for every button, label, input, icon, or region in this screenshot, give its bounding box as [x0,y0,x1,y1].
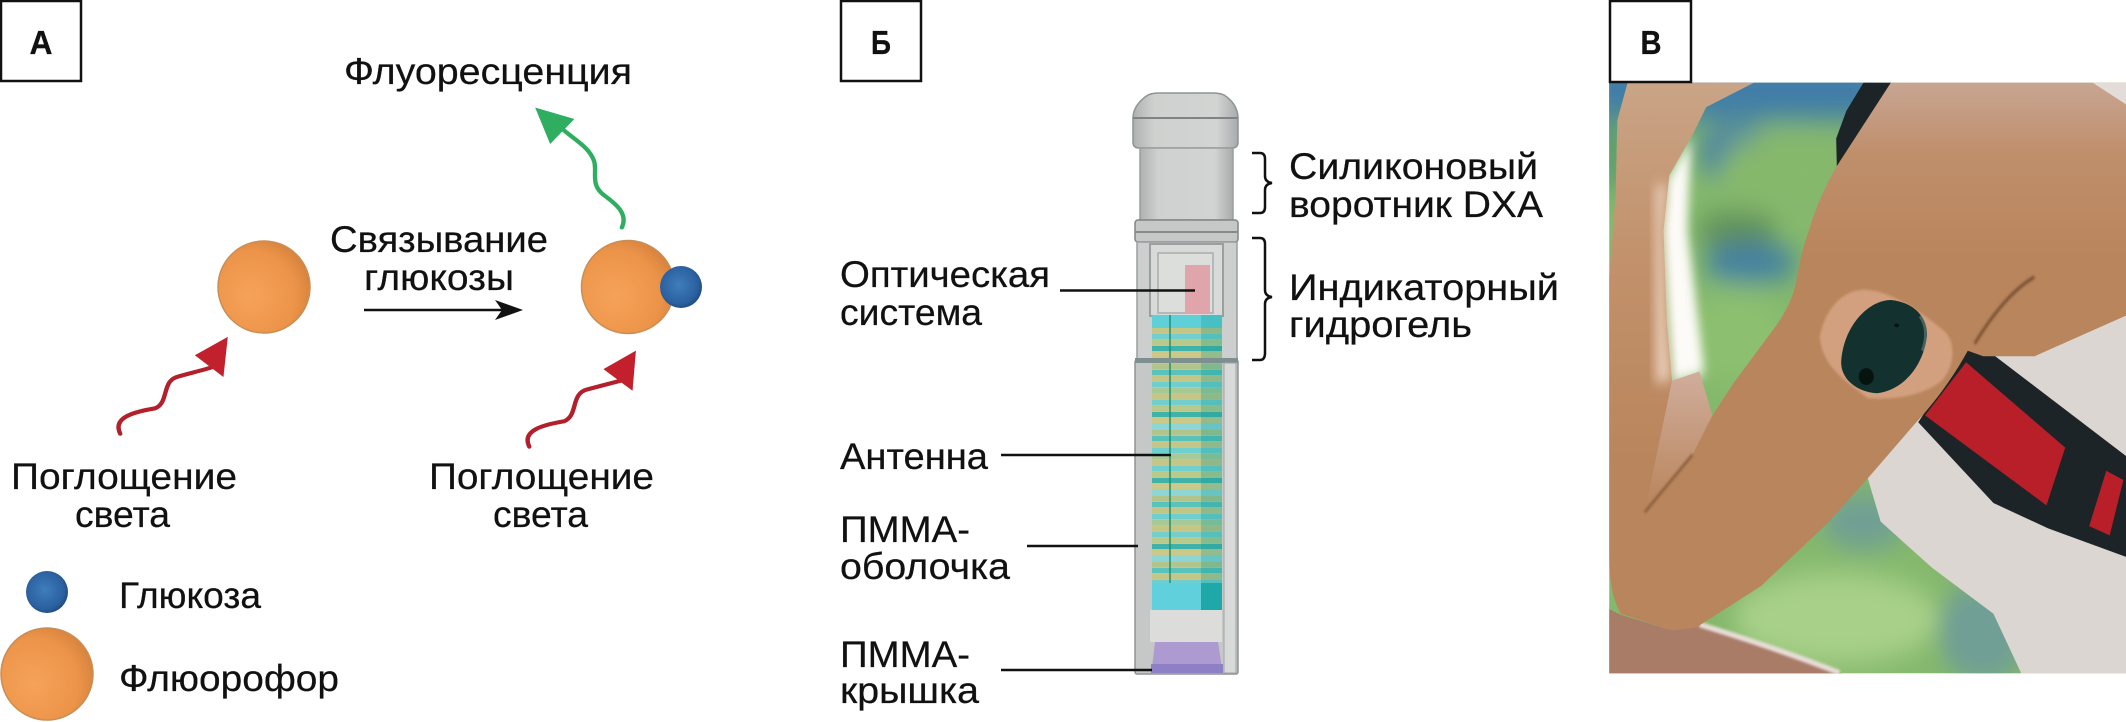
label: PMMA cap: крышка [840,670,979,711]
legend: fluorophore: Флюорофор [119,658,339,699]
label: fluorescence: Флуоресценция [344,51,632,92]
label: glucose binding [330,219,548,298]
chest strap dark [1918,339,2126,558]
hydrogel lower block [1152,583,1222,610]
upper arm and torso [1645,83,2126,630]
label: light absorption right: света [493,494,588,535]
legend: fluorophore [1,628,339,720]
transmitter device [1841,300,1927,393]
label: optical system: Оптическая [840,254,1050,295]
junction line [1135,358,1238,363]
sensor body diagram [1133,93,1238,674]
label: indicator hydrogel: Индикаторный [1289,267,1559,308]
panel label В [1610,1,1691,82]
label: indicator hydrogel [1289,267,1559,345]
label: PMMA cap [840,634,979,711]
fluorophore bound to glucose [582,240,702,334]
optical system [1158,253,1213,313]
label: light absorption left: света [75,494,170,535]
chest strap red [1925,362,2065,505]
brace: silicone collar [1252,153,1272,213]
label: light absorption right [429,456,654,535]
label: silicone collar [1289,146,1543,225]
silicone collar [1140,148,1233,220]
arrow: red absorbed light left [119,337,228,434]
label: PMMA cap: ПММА- [840,634,970,675]
label: PMMA shell: ПММА- [840,509,970,550]
elbow fold [1650,372,1712,490]
sensor cap [1133,93,1238,148]
panel label Б: Б [871,24,891,61]
label: antenna: Антенна [840,436,988,477]
PMMA shell lower [1135,360,1238,674]
label: glucose binding: Связывание [330,219,548,260]
panel label A [1,1,81,81]
fluorophore without glucose [218,241,310,333]
antenna windings [1152,315,1222,610]
shoulder strap [1836,83,1892,167]
legend: glucose [26,571,261,616]
arrow: binding reaction [364,300,523,320]
panel C: sensor on the arm [1590,1,2126,683]
top right shirt corner [2093,83,2126,107]
PMMA cap purple [1151,642,1223,673]
leader lines [1001,290,1195,670]
forearm lit edge [1655,185,1672,383]
label: light absorption left [11,456,237,535]
panel B: sensor construction [840,1,1559,711]
label: PMMA shell: оболочка [840,546,1010,587]
shell inner right wall [1224,363,1236,673]
skin patch [1820,290,1952,399]
label: light absorption right: Поглощение [429,456,654,497]
label: PMMA shell [840,509,1010,587]
brace: indicator hydrogel [1252,238,1272,360]
chest strap small red [2089,471,2123,535]
label: indicator hydrogel: гидрогель [1289,304,1472,345]
collar ring [1135,220,1238,242]
grey spacer [1150,610,1222,642]
shirt [1867,312,2126,674]
label: silicone collar: воротник DXA [1289,184,1543,225]
photo background [1590,60,2126,683]
PMMA shell upper [1137,242,1237,362]
arrow: red absorbed light right [528,351,636,447]
panel A: fluorescence mechanism [1,1,702,720]
panel label A: А [30,24,52,61]
label: optical system: система [840,292,982,333]
panel label Б [841,1,921,81]
arrow: green emitted light [535,108,624,227]
elbow crease [1645,455,1693,512]
label: light absorption left: Поглощение [11,456,237,497]
panel label В: В [1640,24,1662,61]
label: glucose binding: глюкозы [364,257,514,298]
photo: arm with transmitter [1590,60,2126,683]
inner frame [1150,244,1223,316]
forearm and hand [1609,83,1754,630]
indicator hydrogel upper block [1152,315,1222,329]
bottom rail [1609,609,1843,674]
white glow behind forearm [1662,138,1705,383]
label: silicone collar: Силиконовый [1289,146,1538,187]
armpit shadow [1975,277,2034,344]
legend: glucose: Глюкоза [119,575,261,616]
label: optical system [840,254,1050,333]
